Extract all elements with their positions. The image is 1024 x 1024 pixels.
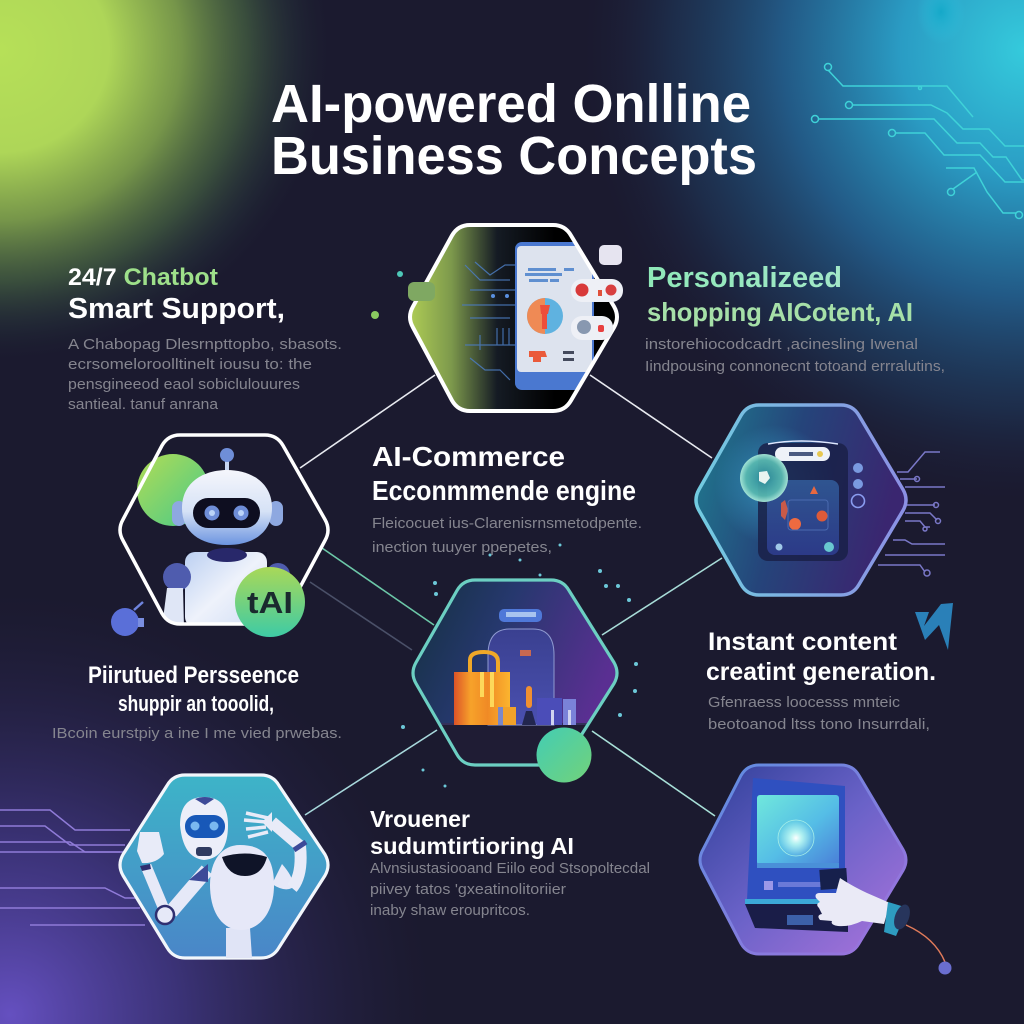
text block: instant content xyxy=(706,628,936,733)
robot figure xyxy=(137,797,306,958)
laptop xyxy=(745,778,850,932)
icon: small robot blob xyxy=(111,602,144,636)
text block: instant content: Gfenraess loocesss mnteic xyxy=(708,694,901,711)
icon: lightning mark xyxy=(915,603,953,650)
text block: monitoring AI xyxy=(370,806,650,919)
shopping bag xyxy=(454,652,516,725)
text block: 24/7 chatbot: 24/7 Chatbot xyxy=(68,264,218,291)
title: Business Concepts xyxy=(271,126,757,186)
panel: chatbot robot hexagon xyxy=(111,435,328,637)
text block: virtual presence: shuppir an tooolid, xyxy=(118,691,274,716)
circuit traces: top right xyxy=(812,64,1024,218)
text block: 24/7 chatbot: ecrsomeloroolltinelt iousu to: the xyxy=(68,356,312,373)
text block: AI-commerce engine xyxy=(372,441,642,556)
text block: personalized shopping: shopping AICotent, AI xyxy=(647,297,913,327)
panel: laptop hexagon xyxy=(700,765,952,974)
text block: personalized shopping: Personalizeed xyxy=(647,262,842,294)
text block: 24/7 chatbot xyxy=(68,264,342,413)
text block: monitoring AI: Alvnsiustasiooand Eiilo eod Stsopoltecdal xyxy=(370,860,650,877)
text block: virtual presence xyxy=(52,662,342,742)
text block: virtual presence: IBcoin eurstpiy a ine I me vied prwebas. xyxy=(52,725,342,742)
tablet device xyxy=(758,441,864,561)
panel: shopping hexagon xyxy=(405,580,625,782)
robot head xyxy=(172,448,283,562)
panel: robot waving hexagon xyxy=(120,775,328,958)
hand and cuff xyxy=(816,868,952,974)
connector lines xyxy=(300,375,722,816)
floating cards xyxy=(371,245,623,340)
orb xyxy=(740,454,788,502)
panel: device hexagon xyxy=(696,405,906,595)
text block: instant content: creatint generation. xyxy=(706,658,936,686)
circuit traces: right of center-right hexagon xyxy=(878,452,945,576)
text block: personalized shopping xyxy=(645,262,945,375)
text block: virtual presence: Piirutued Persseence xyxy=(88,662,299,689)
panel: phone hexagon xyxy=(371,225,623,411)
circuit traces: bottom left xyxy=(0,810,145,925)
phone xyxy=(515,242,594,390)
text block: AI-commerce engine: inection tuuyer ppepetes, xyxy=(372,539,552,556)
text block: monitoring AI: piivey tatos 'gxeatinolitoriier xyxy=(370,881,566,898)
title: AI-powered Onlline xyxy=(271,74,751,134)
text block: instant content: beotoanod ltss tono Insurrdali, xyxy=(708,716,930,733)
text block: monitoring AI: inaby shaw eroupritcos. xyxy=(370,902,530,919)
AI badge xyxy=(235,567,305,637)
text block: AI-commerce engine: Fleicocuet ius-Clarenisrnsmetodpente. xyxy=(372,515,642,532)
text block: AI-commerce engine: Ecconmmende engine xyxy=(372,475,636,506)
text block: 24/7 chatbot: pensgineeod eaol sobiclulouures xyxy=(68,376,300,393)
text block: AI-commerce engine: AI-Commerce xyxy=(372,441,565,472)
text block: 24/7 chatbot: Smart Support, xyxy=(68,293,285,325)
AI badge: tAI xyxy=(247,585,293,620)
text block: instant content: Instant content xyxy=(708,628,898,656)
particles xyxy=(401,544,638,788)
title xyxy=(271,74,757,186)
luggage xyxy=(488,609,576,725)
text block: monitoring AI: Vrouener xyxy=(370,806,470,832)
text block: 24/7 chatbot: A Chabopag Dlesrnpttopbo, sbasots. xyxy=(68,336,342,353)
text block: personalized shopping: instorehiocodcadrt ,acinesling Iwenal xyxy=(645,336,918,353)
text block: monitoring AI: sudumtirtioring AI xyxy=(370,833,574,859)
green circle xyxy=(536,728,592,782)
text block: personalized shopping: Iindpousing connonecnt totoand errralutins, xyxy=(645,358,945,375)
text block: 24/7 chatbot: santieal. tanuf anrana xyxy=(68,396,219,413)
